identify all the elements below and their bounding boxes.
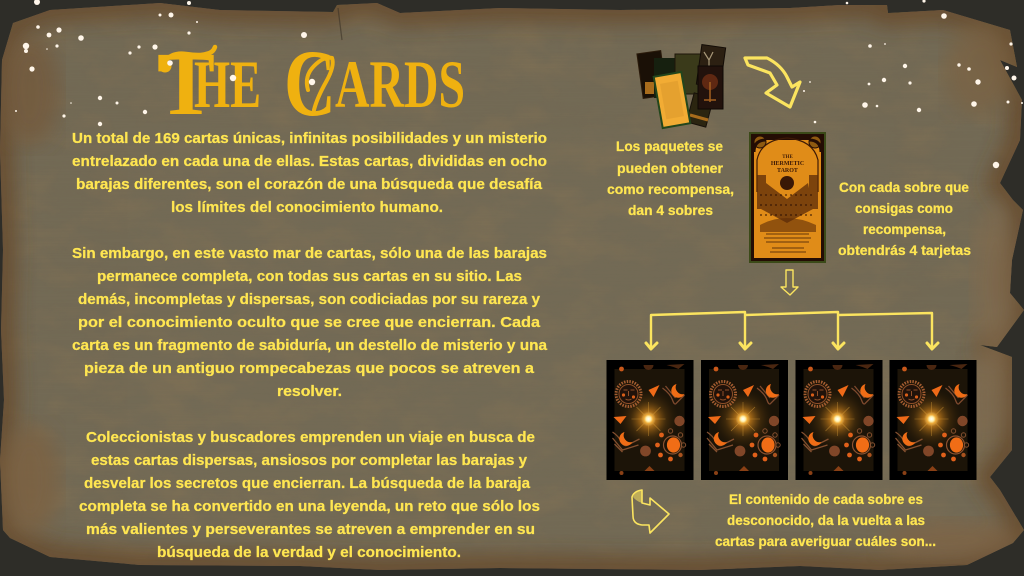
title: C — [284, 30, 336, 136]
text block: sobres caption — [838, 180, 971, 258]
image: fanned tarot card packs — [637, 45, 726, 128]
text block: third paragraph: más valientes y perseverantes se atreven a emprender en su — [86, 521, 535, 538]
text block: packs caption: dan 4 sobres — [628, 203, 713, 218]
arrow: curved arrow to booster — [745, 58, 800, 107]
text block: intro paragraph — [72, 130, 547, 216]
text block: packs caption: pueden obtener — [617, 161, 724, 176]
text block: flip caption: El contenido de cada sobre es — [729, 492, 923, 507]
text block: packs caption: Los paquetes se — [616, 139, 723, 154]
card back 3 — [796, 360, 882, 480]
text block: packs caption — [607, 139, 734, 218]
text block: sobres caption: Con cada sobre que — [839, 180, 969, 195]
text block: intro paragraph: entrelazado en cada una de ellas. Estas cartas, divididas en ocho — [72, 153, 547, 170]
arrow: page-turn arrow — [632, 490, 669, 533]
image: Hermetic Tarot booster: HERMETIC — [771, 161, 804, 167]
text block: flip caption: cartas para averiguar cuáles son... — [715, 534, 936, 549]
text block: second paragraph: por el conocimiento oculto que se cree que encierran. Cada — [78, 314, 541, 331]
image: Hermetic Tarot booster — [749, 132, 826, 263]
text block: second paragraph: Sin embargo, en este vasto mar de cartas, sólo una de las barajas — [72, 245, 547, 262]
text block: third paragraph — [79, 429, 540, 561]
text block: third paragraph: búsqueda de la verdad y el conocimiento. — [157, 544, 461, 561]
text block: packs caption: como recompensa, — [607, 182, 734, 197]
text block: third paragraph: estas cartas dispersas, ansiosos por completar las barajas y — [91, 452, 528, 469]
arrows: branching connector to four cards — [646, 312, 938, 349]
text block: second paragraph: demás, incompletas y dispersas, son codiciadas por su rareza y — [78, 291, 541, 308]
text block: intro paragraph: barajas diferentes, son el corazón de una búsqueda que desafía — [76, 176, 543, 193]
image: Hermetic Tarot booster: TAROT — [777, 168, 798, 174]
image: Hermetic Tarot booster: THE — [782, 155, 793, 160]
card back 1 — [606, 360, 694, 480]
text block: flip caption: desconocido, da la vuelta a las — [727, 513, 925, 528]
arrow: small down arrow — [781, 270, 798, 295]
text block: intro paragraph: los límites del conocimiento humano. — [171, 199, 443, 216]
title — [157, 30, 465, 136]
text block: sobres caption: obtendrás 4 tarjetas — [838, 243, 971, 258]
title: ARDS — [335, 46, 465, 122]
text block: second paragraph: permanece completa, con todas sus cartas en su sitio. Las — [97, 268, 522, 285]
text block: third paragraph: Coleccionistas y buscadores emprenden un viaje en busca de — [86, 429, 535, 446]
card back 4 — [890, 360, 976, 480]
text block: second paragraph: pieza de un antiguo rompecabezas que pocos se atreven a — [84, 360, 535, 377]
text block: flip caption — [715, 492, 936, 549]
decoration: white sparkles — [15, 0, 1023, 168]
text block: sobres caption: recompensa, — [863, 222, 946, 237]
text block: second paragraph — [72, 245, 548, 400]
text block: third paragraph: desvelar los secretos que encierran. La búsqueda de la baraja — [84, 475, 531, 492]
title: HE — [194, 46, 261, 122]
text block: second paragraph: carta es un fragmento de sabiduría, un destello de misterio y una — [72, 337, 548, 354]
text block: third paragraph: completa se ha convertido en una leyenda, un reto que sólo los — [79, 498, 540, 515]
text block: sobres caption: consigas como — [855, 201, 953, 216]
title: T — [157, 35, 215, 134]
card back 2 — [701, 360, 788, 480]
text block: intro paragraph: Un total de 169 cartas únicas, infinitas posibilidades y un misterio — [72, 130, 547, 147]
text block: second paragraph: resolver. — [277, 383, 342, 400]
